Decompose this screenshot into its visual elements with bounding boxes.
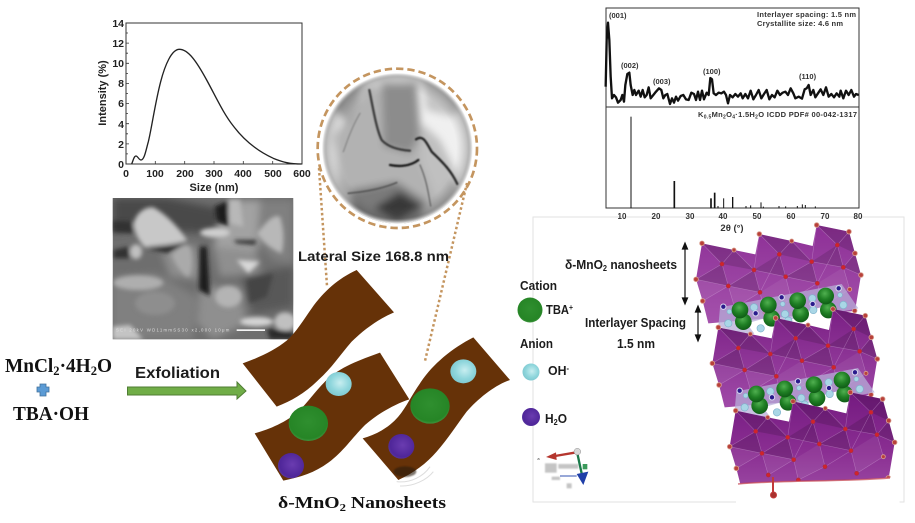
legend: water label: 2 [554,418,558,427]
reference card label: O [726,110,732,119]
x axis labels: 70 [821,212,830,221]
legend: water label: H [545,411,554,426]
interlayer: upper ions [718,284,858,338]
icon: axes triad: a [537,456,540,461]
SEM info strip: SEI 20kV WD11mmSS30 x2,000 10μm [116,328,230,333]
crystal structure [694,223,897,491]
x axis labels: 100 [146,168,164,180]
label: spacing value: 1.5 nm [617,336,655,351]
connector: dotted left [319,168,327,286]
x axis labels: 80 [854,212,863,221]
legend: OH label: OH [548,363,568,378]
image: TEM magnified circle [318,69,477,228]
legend: TBA label: TBA [546,302,573,317]
reference card label: 2 [723,114,726,120]
y axis labels: 6 [118,98,124,110]
peak labels [609,11,817,86]
reference card label: 4 [732,114,735,120]
legend: water label: O [558,411,567,426]
sheet: lower right [363,337,510,486]
y axis labels: 12 [112,38,124,50]
y axis title: Intensity (%) [97,60,109,126]
peak labels: (002) [621,61,639,70]
label: nanosheets: nanosheets [607,257,677,272]
dashed ring [318,69,477,228]
x axis title: Size (nm) [190,182,239,194]
x axis labels: 0 [123,168,129,180]
nanosheets illustration [243,270,510,486]
label: exfoliation: Exfoliation [135,365,220,382]
icon: plus [37,384,49,396]
legend: anion: Anion [520,336,553,351]
plot frame [126,23,302,164]
arrow: sheet thickness [682,243,688,304]
chart: XRD pattern [606,8,863,234]
plot frames [606,8,859,208]
y axis labels: 2 [118,139,124,151]
label: nanosheets: 2 [603,264,608,273]
x axis labels: 600 [293,168,311,180]
annotation: spacing and crystallite size [757,10,856,28]
legend [518,278,573,427]
reactant: MnCl2: O [97,355,112,377]
peak labels: (110) [799,72,817,81]
image: SEM micrograph [113,198,296,339]
x axis labels: 400 [234,168,252,180]
legend: OH label: - [566,364,569,373]
reference card label: ·1.5H [735,110,755,119]
x axis labels [123,168,311,180]
panel: crystal structure backdrop [533,217,904,502]
y axis labels: 10 [112,58,124,70]
reference card label: Mn [712,110,723,119]
scale bar [237,329,265,331]
sheet: lower left [255,353,409,481]
x axis labels: 300 [205,168,223,180]
reference card label: K [698,110,703,119]
reactant: MnCl2: MnCl [5,355,55,377]
x axis labels: 40 [719,212,728,221]
diffraction trace [606,23,859,104]
sheet: top [243,270,394,407]
legend: TBA sphere [518,298,542,322]
legend: OH sphere [522,364,540,380]
layer: top sheet [694,223,863,323]
peak labels: (003) [653,77,671,86]
reference sticks [631,117,815,208]
reactant: MnCl2: ·4H [60,355,91,377]
title: nanosheets: Nanosheets [346,493,446,512]
heading: lateral size: Lateral Size 168.8 nm [298,249,449,264]
x axis labels: 30 [686,212,695,221]
interlayer: lower ions [735,368,875,422]
label: nanosheets: δ-MnO [565,257,606,272]
arrow: interlayer [696,306,700,341]
legend: TBA label: + [569,303,573,312]
x axis labels: 500 [264,168,282,180]
legend: water sphere [522,408,540,426]
y axis labels: 4 [118,119,124,131]
title: nanosheets: δ-MnO [278,493,331,512]
peak labels: (001) [609,11,627,20]
connector: dotted right [425,183,467,361]
legend: cation: Cation [520,278,557,293]
annotation: spacing and crystallite size: Interlayer spacing: 1.5 nm [757,10,856,19]
distribution curve [132,49,302,164]
layer: bottom sheet [727,390,897,491]
y axis labels [112,18,124,171]
label: interlayer spacing: Interlayer Spacing [585,315,686,330]
x axis labels: 200 [176,168,194,180]
reference card label: 0.5 [704,114,711,120]
annotation: spacing and crystallite size: Crystallite size: 4.6 nm [757,19,843,28]
reactant: MnCl2: 2 [53,363,60,378]
reference card label: 2 [755,114,758,120]
arrow: exfoliation [128,382,246,399]
y axis labels: 0 [118,159,124,171]
x axis labels: 10 [618,212,627,221]
peak labels: (100) [703,67,721,76]
title: nanosheets: 2 [340,502,347,514]
x axis labels: 20 [652,212,661,221]
x axis labels [618,212,863,221]
icon: axes triad [537,448,588,488]
y axis labels: 14 [112,18,124,30]
layer: middle sheet [710,307,880,407]
x axis title: 2θ (°) [720,223,744,234]
y axis labels: 8 [118,78,124,90]
x axis labels: 50 [753,212,762,221]
crystal base stub [770,477,776,498]
crystal base mask [736,477,900,505]
chart: particle size distribution [97,18,311,194]
reactant: MnCl2: 2 [91,363,97,378]
reactant: TBA OH: TBA·OH [13,403,89,425]
reference card label: O ICDD PDF# 00-042-1317 [758,110,857,119]
crystal base fuzz [738,478,890,484]
x axis labels: 60 [787,212,796,221]
